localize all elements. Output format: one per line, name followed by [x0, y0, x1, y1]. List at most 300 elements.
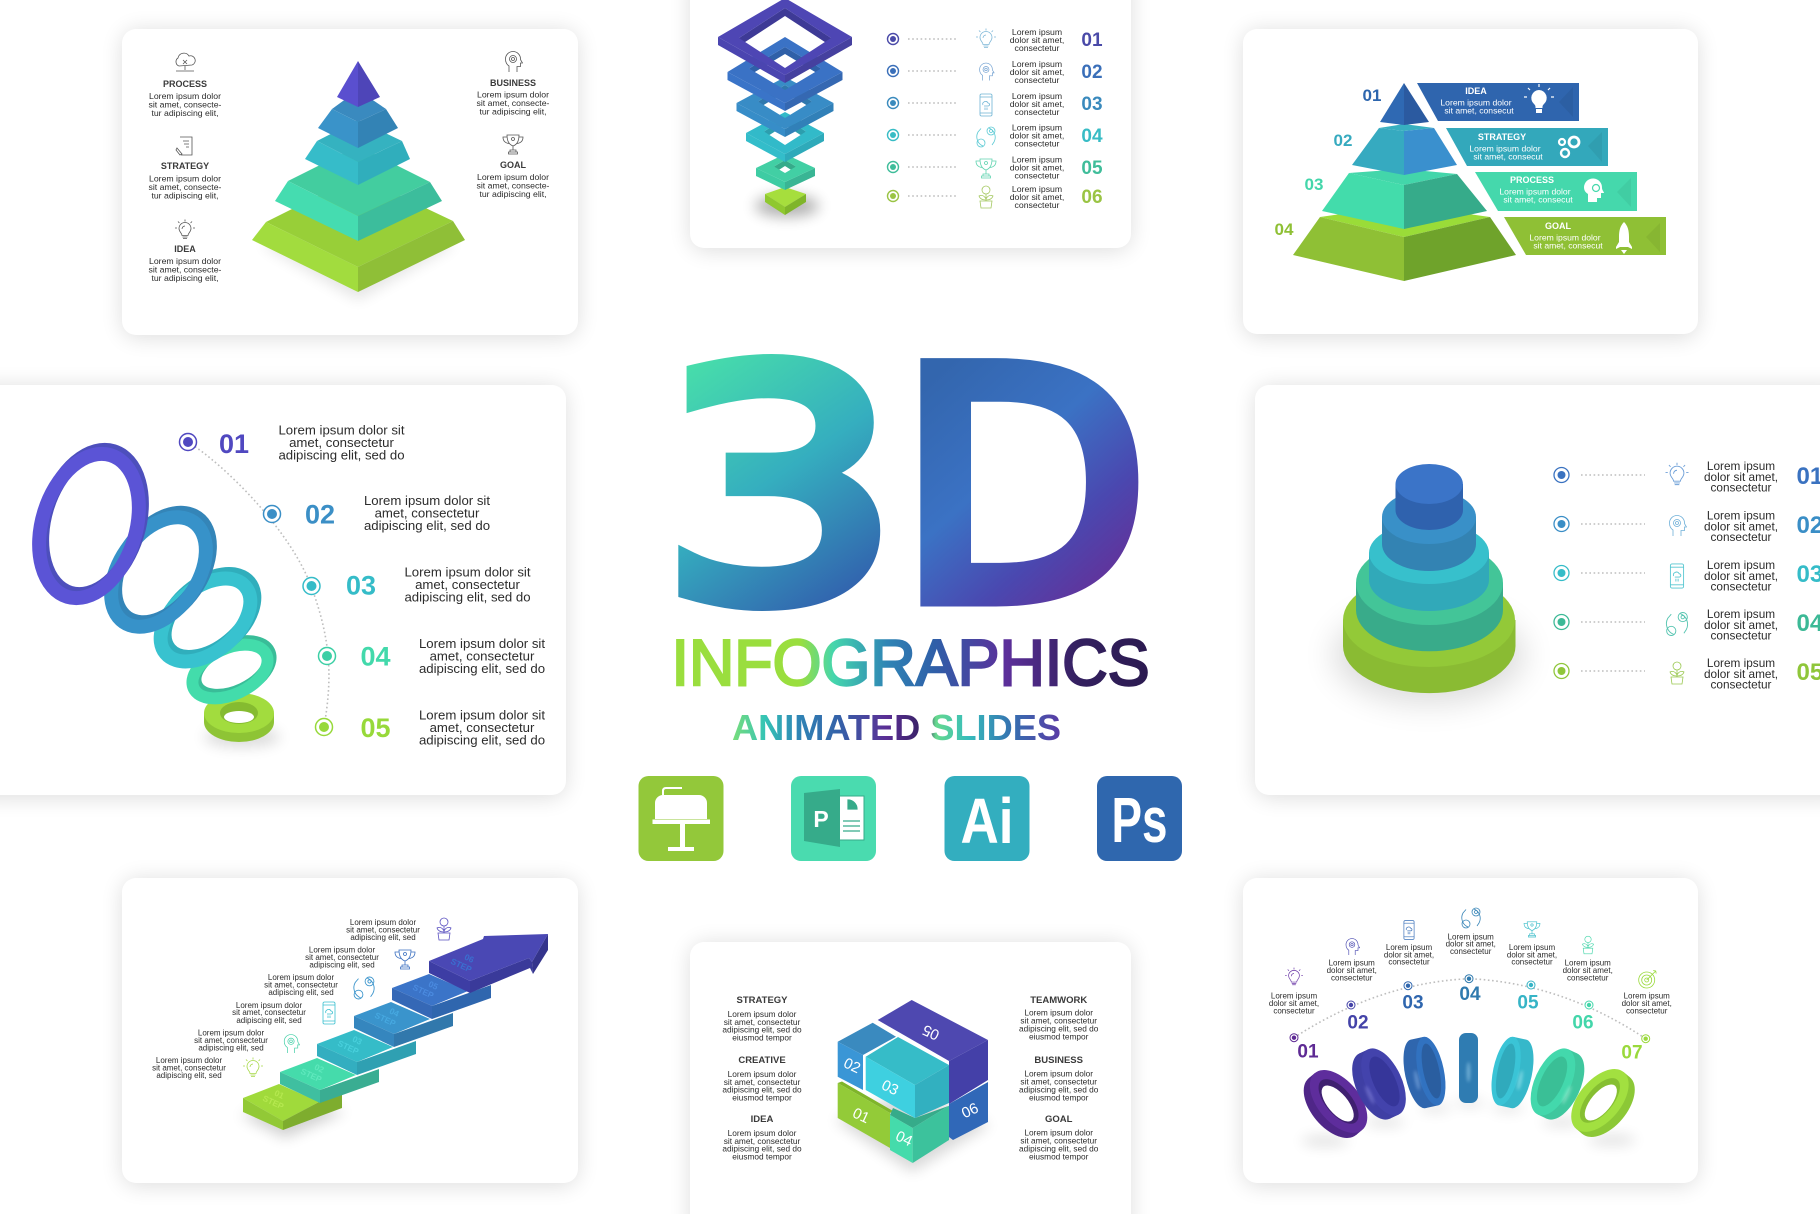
column 04: 04 [1459, 984, 1481, 1005]
text: business: BUSINESS [1034, 1055, 1083, 1066]
row 06: 06 [1081, 187, 1103, 208]
row 04: adipiscing elit, sed do [419, 661, 545, 676]
tyre 02 indigo [1343, 1042, 1415, 1126]
ribbon idea: IDEA [1465, 86, 1487, 96]
card background [1243, 29, 1698, 334]
block 06: 06 [959, 1100, 981, 1122]
row 04: Lorem ipsum [1012, 122, 1062, 132]
tier numbers: 01 [1363, 86, 1381, 105]
text: business: Lorem ipsum dolor [1024, 1069, 1093, 1079]
row 01 [180, 422, 405, 462]
row 01: Lorem ipsum [1707, 459, 1775, 473]
card background [690, 942, 1131, 1214]
panel: stair steps arrow [122, 878, 578, 1183]
text: idea [149, 244, 222, 283]
row 02: amet, consectetur [375, 506, 480, 520]
row 01 [1554, 459, 1820, 494]
tier numbers [1275, 86, 1381, 239]
title: 3D [660, 304, 1148, 672]
icon: illustrator tile [944, 776, 1030, 861]
icon bulb [243, 1058, 263, 1076]
column 05 [1507, 922, 1557, 1014]
ribbon strategy: sit amet, consecut [1473, 152, 1543, 162]
row 02 [1554, 508, 1820, 544]
icon head [284, 1035, 300, 1053]
text: idea [722, 1114, 802, 1162]
text: creative: eiusmod tempor [732, 1093, 792, 1103]
text row 6: sit amet, consectetur [346, 926, 420, 934]
row 02: dolor sit amet, [1704, 520, 1778, 534]
row 03: Lorem ipsum [1707, 558, 1775, 572]
column 02: 02 [1347, 1012, 1369, 1034]
text: strategy: sit amet, consecte- [149, 182, 222, 192]
step 04 blue [354, 1002, 453, 1047]
row 01: consectetur [1015, 43, 1060, 53]
step 06 arrow purple: 06 [463, 952, 476, 965]
column 07: 07 [1621, 1042, 1643, 1064]
text: goal: GOAL [1045, 1114, 1073, 1125]
row 01: dolor sit amet, [1704, 470, 1778, 484]
tyre 07 green [1560, 1059, 1646, 1147]
digit 3: 3 [660, 305, 900, 672]
frame 2 royal blue [728, 37, 842, 111]
step 03 teal: 03 [351, 1034, 364, 1047]
icon: trophy [503, 135, 523, 154]
card background [690, 0, 1131, 248]
step 06 arrow purple: STEP [449, 956, 474, 975]
text: creative: Lorem ipsum dolor [728, 1069, 797, 1079]
ribbon idea: Lorem ipsum dolor [1440, 98, 1512, 108]
text: strategy: adipiscing elit, sed do [722, 1025, 802, 1035]
frame 6 green [765, 187, 806, 215]
icon: illustrator tile: Ai [960, 785, 1014, 857]
pyramid tier 03 [1322, 169, 1487, 229]
column 02: dolor sit amet, [1327, 966, 1377, 975]
row 03: 03 [346, 570, 376, 600]
row 04: consectetur [1711, 628, 1772, 642]
text: teamwork: TEAMWORK [1030, 995, 1087, 1006]
text: creative [722, 1055, 802, 1103]
column 03: consectetur [1388, 958, 1430, 966]
block 04: 04 [893, 1128, 915, 1150]
row 01: consectetur [1711, 480, 1772, 494]
row 05 [316, 708, 545, 748]
row 03 [888, 91, 1103, 117]
block 01: 01 [850, 1105, 872, 1127]
text row 5 [305, 946, 379, 970]
row 03: consectetur [1015, 107, 1060, 117]
panel: pyramid with ribbons [1243, 29, 1698, 334]
row 02: dolor sit amet, [1010, 67, 1064, 77]
step 04 blue: 04 [388, 1006, 401, 1019]
step 01 green [243, 1084, 342, 1130]
row 03: Lorem ipsum dolor sit [404, 564, 531, 580]
text: idea: adipiscing elit, sed do [722, 1144, 802, 1154]
row 05 [888, 154, 1103, 180]
text: idea: IDEA [174, 244, 196, 254]
text row 4: Lorem ipsum dolor [268, 973, 334, 982]
block 05: 05 [920, 1021, 942, 1043]
column 04: Lorem ipsum [1448, 932, 1494, 942]
ribbon process: sit amet, consecut [1503, 194, 1573, 204]
block 04 [890, 1106, 949, 1163]
text: idea: Lorem ipsum dolor [728, 1128, 797, 1138]
panel: seven tyres arc [1243, 878, 1698, 1183]
row 02: adipiscing elit, sed do [364, 518, 490, 533]
text: idea: tur adipiscing elit, [151, 273, 219, 283]
text row 1: Lorem ipsum dolor [156, 1056, 222, 1065]
row 02: consectetur [1015, 75, 1060, 85]
text row 1 [152, 1056, 226, 1080]
row 01: Lorem ipsum dolor sit [278, 422, 405, 438]
text: strategy: Lorem ipsum dolor [728, 1009, 797, 1019]
column 06: dolor sit amet, [1563, 966, 1613, 975]
column 03: Lorem ipsum [1386, 943, 1432, 952]
ribbon process: Lorem ipsum dolor [1499, 186, 1571, 196]
tyre 04 steel blue [1459, 1033, 1478, 1103]
block 05 [878, 1000, 988, 1104]
text: process: Lorem ipsum dolor [149, 91, 221, 101]
subheading: animated slides: ANIMATED SLIDES [732, 707, 1061, 748]
text: teamwork: sit amet, consectetur [1020, 1015, 1097, 1025]
text: strategy: eiusmod tempor [732, 1033, 792, 1043]
heading: infographics: INFOGRAPHICS [672, 626, 1150, 699]
panel: five rings [0, 385, 566, 795]
row 03 [1554, 558, 1820, 594]
column 07: consectetur [1626, 1006, 1668, 1016]
dotted arc [1294, 979, 1646, 1039]
text: idea: Lorem ipsum dolor [149, 256, 221, 266]
frame 1 purple [718, 0, 852, 83]
row 03 [303, 564, 531, 604]
text row 2: adipiscing elit, sed [198, 1044, 264, 1052]
tier numbers: 03 [1305, 175, 1323, 194]
block 06 [949, 1082, 988, 1140]
row 03: dolor sit amet, [1010, 99, 1064, 109]
tyre shadows [1301, 1100, 1636, 1145]
panel: block cube [690, 942, 1131, 1214]
row 05: 05 [1081, 158, 1103, 179]
text: strategy: Lorem ipsum dolor [149, 174, 221, 184]
block 03 [866, 1037, 949, 1118]
row 01: 01 [219, 429, 249, 459]
column 04: dolor sit amet, [1446, 940, 1496, 949]
column 07: dolor sit amet, [1622, 999, 1672, 1008]
pyramid tier 5 green [252, 176, 465, 292]
text: strategy [722, 995, 802, 1043]
text: process: PROCESS [163, 79, 207, 89]
tier 4 mint [1356, 541, 1503, 651]
tier 2 blue [1382, 490, 1476, 571]
text: goal: eiusmod tempor [1029, 1151, 1089, 1161]
icon: keynote tile [638, 776, 724, 861]
text row 5: sit amet, consectetur [305, 953, 379, 962]
pyramid tier 02 [1352, 124, 1457, 175]
step 05 royal blue: STEP [411, 982, 436, 1001]
icon: powerpoint tile [791, 776, 876, 861]
block 01 [838, 1082, 893, 1148]
row 02: Lorem ipsum dolor sit [364, 493, 490, 508]
column 05: Lorem ipsum [1509, 943, 1555, 952]
icon plant [437, 918, 451, 940]
step 01 green: STEP [261, 1093, 286, 1112]
card background [122, 29, 578, 335]
icon: cloud [176, 53, 195, 71]
row 01: Lorem ipsum [1012, 27, 1062, 37]
text row 4: sit amet, consectetur [264, 981, 338, 990]
tyre 03 blue [1398, 1034, 1451, 1111]
row 05: consectetur [1711, 678, 1772, 692]
row 02: consectetur [1711, 530, 1772, 544]
text: creative: CREATIVE [738, 1055, 786, 1066]
ribbon strategy: STRATEGY [1478, 132, 1526, 142]
row 04 [888, 122, 1103, 148]
icon: head [506, 52, 522, 72]
row 01: dolor sit amet, [1010, 35, 1064, 45]
step 01 green: 01 [273, 1088, 286, 1101]
row 02: 02 [305, 500, 335, 530]
column 06 [1563, 936, 1613, 1034]
text: strategy [149, 161, 222, 200]
text: strategy: STRATEGY [736, 995, 788, 1006]
frame 5 mint [756, 154, 815, 190]
letter D: D [898, 304, 1148, 672]
row 04: Lorem ipsum [1707, 607, 1775, 621]
ring 5 green [204, 693, 274, 742]
ribbon strategy [1446, 128, 1608, 166]
text row 4 [264, 973, 338, 997]
pyramid tier 2 blue [318, 90, 398, 148]
column 06: Lorem ipsum [1565, 959, 1611, 968]
ribbon process: PROCESS [1510, 175, 1554, 185]
text row 5: adipiscing elit, sed [309, 961, 375, 970]
row 05 [1554, 656, 1820, 692]
text: goal: tur adipiscing elit, [479, 189, 547, 199]
text row 6 [346, 918, 420, 942]
row 03: amet, consectetur [415, 577, 521, 592]
column 01: Lorem ipsum [1271, 992, 1317, 1001]
text: business: sit amet, consecte- [477, 98, 550, 108]
text: process [149, 79, 222, 118]
row 02 [264, 493, 490, 533]
text: business: eiusmod tempor [1029, 1092, 1089, 1102]
row 02: Lorem ipsum [1707, 508, 1775, 522]
text: business: BUSINESS [490, 78, 536, 88]
column 07 [1621, 970, 1672, 1064]
text: teamwork: adipiscing elit, sed do [1019, 1023, 1099, 1033]
icon: bulb [175, 220, 195, 238]
row 02: Lorem ipsum [1012, 59, 1062, 69]
step 06 arrow purple [429, 934, 548, 993]
column 02 [1327, 939, 1377, 1034]
tyre 01 purple [1293, 1060, 1378, 1148]
frames shadow [755, 195, 819, 217]
row 03: dolor sit amet, [1704, 569, 1778, 583]
text: creative: adipiscing elit, sed do [722, 1085, 802, 1095]
pyramid tier 04 [1293, 205, 1516, 281]
row 06 [888, 184, 1103, 210]
step 03 teal [317, 1030, 416, 1075]
text row 5: Lorem ipsum dolor [309, 946, 375, 954]
ribbon goal [1504, 217, 1666, 255]
step 03 teal: STEP [336, 1038, 361, 1057]
text: business [1019, 1055, 1099, 1102]
column 03: dolor sit amet, [1384, 950, 1434, 960]
text row 1: adipiscing elit, sed [156, 1071, 222, 1080]
row 05: dolor sit amet, [1010, 162, 1064, 172]
row 05: dolor sit amet, [1704, 667, 1778, 681]
text: business: sit amet, consectetur [1020, 1077, 1097, 1087]
dotted curve [188, 442, 329, 727]
row 01: 01 [1081, 30, 1103, 51]
step 02 mint: 02 [313, 1062, 326, 1075]
column 02: consectetur [1331, 974, 1373, 982]
ribbon strategy: Lorem ipsum dolor [1469, 144, 1541, 154]
cube shadow [835, 1090, 990, 1172]
column 03 [1384, 921, 1434, 1014]
ribbon goal: sit amet, consecut [1533, 240, 1603, 250]
text row 2: sit amet, consectetur [194, 1036, 268, 1045]
row 04 [1554, 607, 1820, 642]
tier numbers: 04 [1275, 220, 1294, 239]
row 05: Lorem ipsum dolor sit [419, 708, 545, 722]
text: strategy: STRATEGY [161, 161, 209, 171]
ribbon idea: sit amet, consecut [1444, 106, 1514, 116]
text: idea: sit amet, consectetur [724, 1136, 801, 1146]
pyramid tip purple [337, 61, 380, 107]
ring 4 mint [184, 631, 278, 709]
row 05: adipiscing elit, sed do [419, 732, 545, 748]
icon trophy [395, 950, 415, 969]
text row 4: adipiscing elit, sed [268, 988, 334, 997]
text: goal: sit amet, consectetur [1020, 1135, 1097, 1145]
tier 5 green [1343, 573, 1516, 693]
text: business: adipiscing elit, sed do [1019, 1084, 1099, 1094]
text: business [477, 78, 550, 116]
panel: four-point pyramid with icons [122, 29, 578, 335]
row 06: Lorem ipsum [1012, 184, 1062, 194]
text: goal: GOAL [500, 160, 527, 170]
text row 2: Lorem ipsum dolor [198, 1028, 264, 1038]
column 07: Lorem ipsum [1624, 992, 1670, 1001]
column 05: dolor sit amet, [1507, 950, 1557, 960]
column 03: 03 [1402, 992, 1424, 1014]
icon: photoshop tile [1097, 776, 1182, 861]
ring 1 purple [22, 437, 159, 611]
step 04 blue: STEP [373, 1010, 398, 1029]
ring 3 teal [145, 558, 269, 678]
pyramid tier 4 mint [275, 146, 442, 241]
text: teamwork: Lorem ipsum dolor [1024, 1008, 1093, 1018]
text: idea: sit amet, consecte- [149, 264, 222, 274]
step 05 royal blue [392, 974, 491, 1019]
row 06: consectetur [1015, 200, 1060, 210]
column 04: consectetur [1450, 947, 1492, 956]
pyramid tier 01 [1380, 83, 1429, 125]
row 05: 05 [360, 713, 391, 743]
row 06: dolor sit amet, [1010, 192, 1064, 202]
column 05: 05 [1517, 992, 1539, 1014]
row 04: 04 [360, 642, 391, 672]
icon cycle [354, 977, 374, 999]
icon: powerpoint tile: P [813, 806, 829, 832]
text row 1: sit amet, consectetur [152, 1064, 226, 1072]
row 03: adipiscing elit, sed do [404, 590, 531, 604]
card background [1255, 385, 1820, 795]
column 01: dolor sit amet, [1269, 999, 1319, 1008]
column 06: 06 [1572, 1012, 1594, 1034]
row 01 [888, 27, 1103, 53]
text: goal: sit amet, consecte- [477, 180, 550, 190]
row 05: consectetur [1015, 170, 1060, 180]
step 02 mint [280, 1058, 379, 1103]
text row 3 [232, 1001, 306, 1025]
panel: layered cake [1255, 385, 1820, 795]
text row 2 [194, 1028, 268, 1052]
text: goal: Lorem ipsum dolor [1024, 1128, 1093, 1138]
column 02: Lorem ipsum [1329, 959, 1375, 968]
row 03: 03 [1081, 94, 1103, 115]
text: goal [477, 160, 550, 199]
row 05: Lorem ipsum [1012, 154, 1062, 164]
row 04: dolor sit amet, [1010, 130, 1064, 140]
card background [122, 878, 578, 1183]
pyramid tier 3 teal [305, 120, 410, 185]
row 04: 04 [1081, 126, 1103, 147]
ribbon idea [1417, 83, 1579, 121]
row 05: amet, consectetur [430, 720, 535, 735]
tier 3 teal [1369, 522, 1489, 611]
row 04 [318, 636, 545, 676]
frame 4 teal [746, 112, 824, 162]
text row 6: adipiscing elit, sed [350, 933, 416, 942]
block 02 [838, 1023, 896, 1090]
ribbon process [1475, 172, 1637, 211]
row 05: Lorem ipsum [1707, 656, 1775, 670]
ribbon goal: Lorem ipsum dolor [1529, 232, 1601, 242]
row 02: 02 [1081, 62, 1103, 83]
text: strategy: tur adipiscing elit, [151, 190, 219, 200]
ring 2 blue [92, 496, 229, 644]
column 01: consectetur [1273, 1006, 1315, 1016]
text: process: sit amet, consecte- [149, 100, 222, 110]
icon: note [176, 137, 192, 155]
tyre 06 mint [1521, 1042, 1594, 1126]
pyramid shadow [262, 200, 455, 300]
text row 6: Lorem ipsum dolor [350, 918, 416, 927]
row 04: amet, consectetur [430, 648, 535, 664]
column 01 [1269, 968, 1319, 1062]
block 02: 02 [841, 1055, 863, 1077]
text: idea: IDEA [751, 1114, 773, 1125]
panel: stacked frames list [690, 0, 1131, 248]
frame 3 blue [736, 77, 834, 137]
step 05 royal blue: 05 [427, 979, 440, 992]
tier 1 royal blue [1396, 464, 1463, 530]
row 04: dolor sit amet, [1704, 618, 1778, 632]
card background [1243, 878, 1698, 1183]
icon phone [323, 1002, 335, 1024]
row 04: Lorem ipsum dolor sit [419, 636, 545, 651]
text: business: tur adipiscing elit, [479, 106, 547, 116]
step 02 mint: STEP [299, 1066, 324, 1085]
tier numbers: 02 [1334, 131, 1352, 150]
column 06: consectetur [1567, 974, 1609, 982]
ring shadow [204, 727, 280, 747]
card background [0, 385, 566, 795]
text: business: Lorem ipsum dolor [477, 90, 549, 100]
text: teamwork [1019, 995, 1099, 1041]
